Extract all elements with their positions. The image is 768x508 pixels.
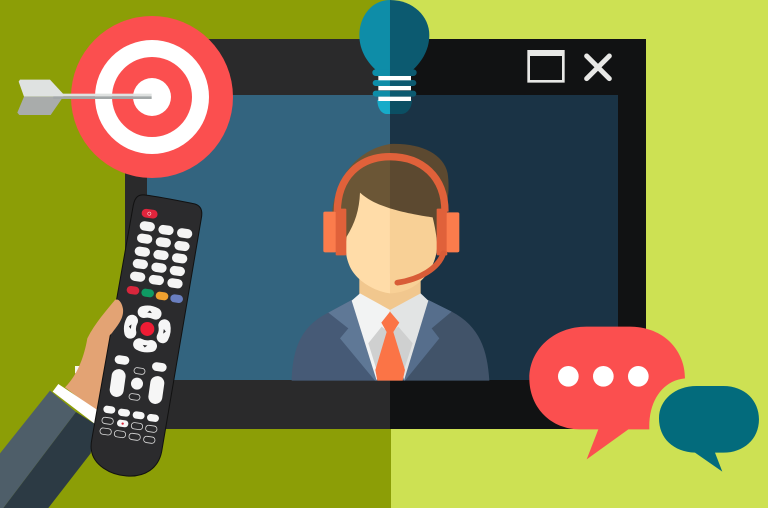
icon: customer support agent with headset xyxy=(292,144,489,381)
headset microphone xyxy=(397,253,443,283)
icon: dart arrow xyxy=(17,80,152,115)
icon: window maximize and close buttons xyxy=(527,50,609,83)
headset band xyxy=(337,157,445,212)
agent shirt and tie xyxy=(352,293,428,381)
outlined small buttons xyxy=(100,367,157,444)
agent neck xyxy=(359,273,421,317)
icon: red speech bubble with dots xyxy=(529,327,685,459)
number buttons xyxy=(129,221,193,289)
power button xyxy=(141,208,158,219)
icon: tv remote control xyxy=(91,195,202,476)
icon: lightbulb xyxy=(359,0,429,114)
lower control buttons xyxy=(103,355,167,428)
record dot xyxy=(121,422,124,425)
icon: teal speech bubble xyxy=(659,386,759,472)
agent face xyxy=(346,193,437,293)
colour buttons xyxy=(126,285,183,303)
agent hair xyxy=(332,144,449,243)
icon: thumb over remote xyxy=(100,299,123,345)
icon: hand and suit sleeve xyxy=(0,300,140,508)
remote body xyxy=(91,195,202,476)
agent suit xyxy=(292,300,489,381)
directional pad xyxy=(129,310,166,348)
icon: target xyxy=(71,16,233,178)
headset ear cups xyxy=(323,209,459,255)
panel: video window frame xyxy=(125,39,646,429)
